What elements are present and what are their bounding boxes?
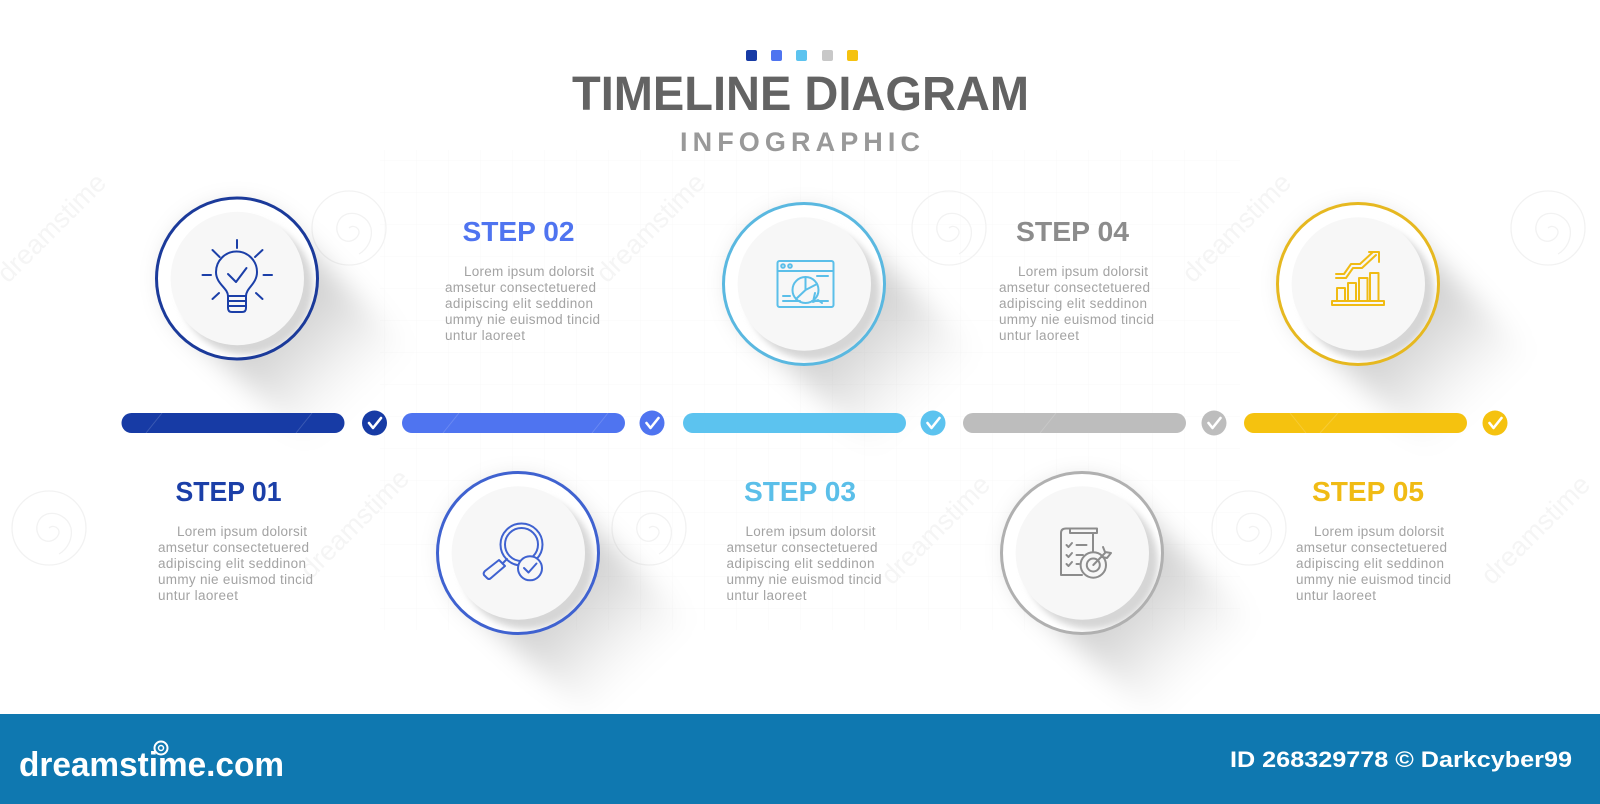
text block: step 4 <box>999 216 1154 343</box>
text block: step 3: amsetur consectetuered <box>726 540 878 555</box>
text block: step 1: Lorem ipsum dolorsit <box>177 524 307 539</box>
text block: step 2 <box>445 216 600 343</box>
text block: step 4: ummy nie euismod tincid <box>999 312 1154 327</box>
footer credit: ID 268329778 © Darkcyber99 <box>1230 747 1572 772</box>
text block: step 2: ummy nie euismod tincid <box>445 312 600 327</box>
text block: step 2: untur laoreet <box>445 328 525 343</box>
panel: step 1 circle <box>156 198 362 398</box>
text block: step 4: STEP 04 <box>1016 216 1129 247</box>
icon: light bulb <box>202 240 272 312</box>
text block: step 5: untur laoreet <box>1296 588 1376 603</box>
text block: step 4: Lorem ipsum dolorsit <box>1018 264 1148 279</box>
check: step 4 <box>1202 410 1226 436</box>
check: step 1 <box>362 410 387 436</box>
check: step 3 <box>920 410 946 436</box>
watermark: dreamstime <box>294 463 415 584</box>
panel: step 2 circle <box>438 472 643 673</box>
footer banner <box>0 714 1600 804</box>
text block: step 1: STEP 01 <box>176 476 282 507</box>
text block: step 3 <box>726 476 882 603</box>
subtitle: INFOGRAPHIC <box>680 127 920 157</box>
check: step 5 <box>1482 410 1508 436</box>
watermark: dreamstime <box>1176 167 1297 288</box>
text block: step 2: Lorem ipsum dolorsit <box>464 264 594 279</box>
watermark: dreamstime <box>590 167 711 288</box>
panel: step 5 circle <box>1278 204 1483 404</box>
text block: step 4: amsetur consectetuered <box>999 280 1150 295</box>
text block: step 5: STEP 05 <box>1312 476 1424 507</box>
watermark <box>0 167 1596 590</box>
panel: step 3 circle <box>724 204 929 404</box>
text block: step 3: ummy nie euismod tincid <box>726 572 882 587</box>
bar: step 2 <box>402 413 625 433</box>
colour legend squares <box>746 50 858 61</box>
text block: step 5 <box>1296 476 1451 603</box>
bar: step 4 <box>963 413 1186 433</box>
text block: step 1: ummy nie euismod tincid <box>158 572 313 587</box>
text block: step 5: adipiscing elit seddinon <box>1296 556 1444 571</box>
text block: step 3: untur laoreet <box>726 588 807 603</box>
text block: step 3: Lorem ipsum dolorsit <box>746 524 876 539</box>
text block: step 1: adipiscing elit seddinon <box>158 556 306 571</box>
text block: step 3: STEP 03 <box>744 476 856 507</box>
icon: checklist with target <box>1061 528 1111 578</box>
check: step 2 <box>640 410 664 436</box>
footer logo: dreamstime.com <box>19 746 284 784</box>
text block: step 1: amsetur consectetuered <box>158 540 309 555</box>
bar: step 3 <box>683 413 906 433</box>
bar: step 5 <box>1244 413 1467 433</box>
text block: step 2: adipiscing elit seddinon <box>445 296 593 311</box>
bar: step 1 <box>122 413 344 433</box>
icon: growth bar chart <box>1332 252 1384 305</box>
watermark: dreamstime <box>1475 469 1596 590</box>
text block: step 2: amsetur consectetuered <box>445 280 596 295</box>
icon: magnifier with check <box>484 524 542 580</box>
text block: step 1 <box>158 476 313 603</box>
icon: browser with pie chart <box>778 261 834 307</box>
text block: step 2: STEP 02 <box>462 216 574 247</box>
text block: step 5: amsetur consectetuered <box>1296 540 1447 555</box>
text block: step 4: untur laoreet <box>999 328 1079 343</box>
text block: step 1: untur laoreet <box>158 588 238 603</box>
text block: step 4: adipiscing elit seddinon <box>999 296 1147 311</box>
watermark: dreamstime <box>875 469 996 590</box>
text block: step 5: Lorem ipsum dolorsit <box>1314 524 1444 539</box>
title: TIMELINE DIAGRAM <box>572 68 1029 121</box>
text block: step 5: ummy nie euismod tincid <box>1296 572 1451 587</box>
text block: step 3: adipiscing elit seddinon <box>726 556 874 571</box>
panel: step 4 circle <box>1002 472 1207 673</box>
